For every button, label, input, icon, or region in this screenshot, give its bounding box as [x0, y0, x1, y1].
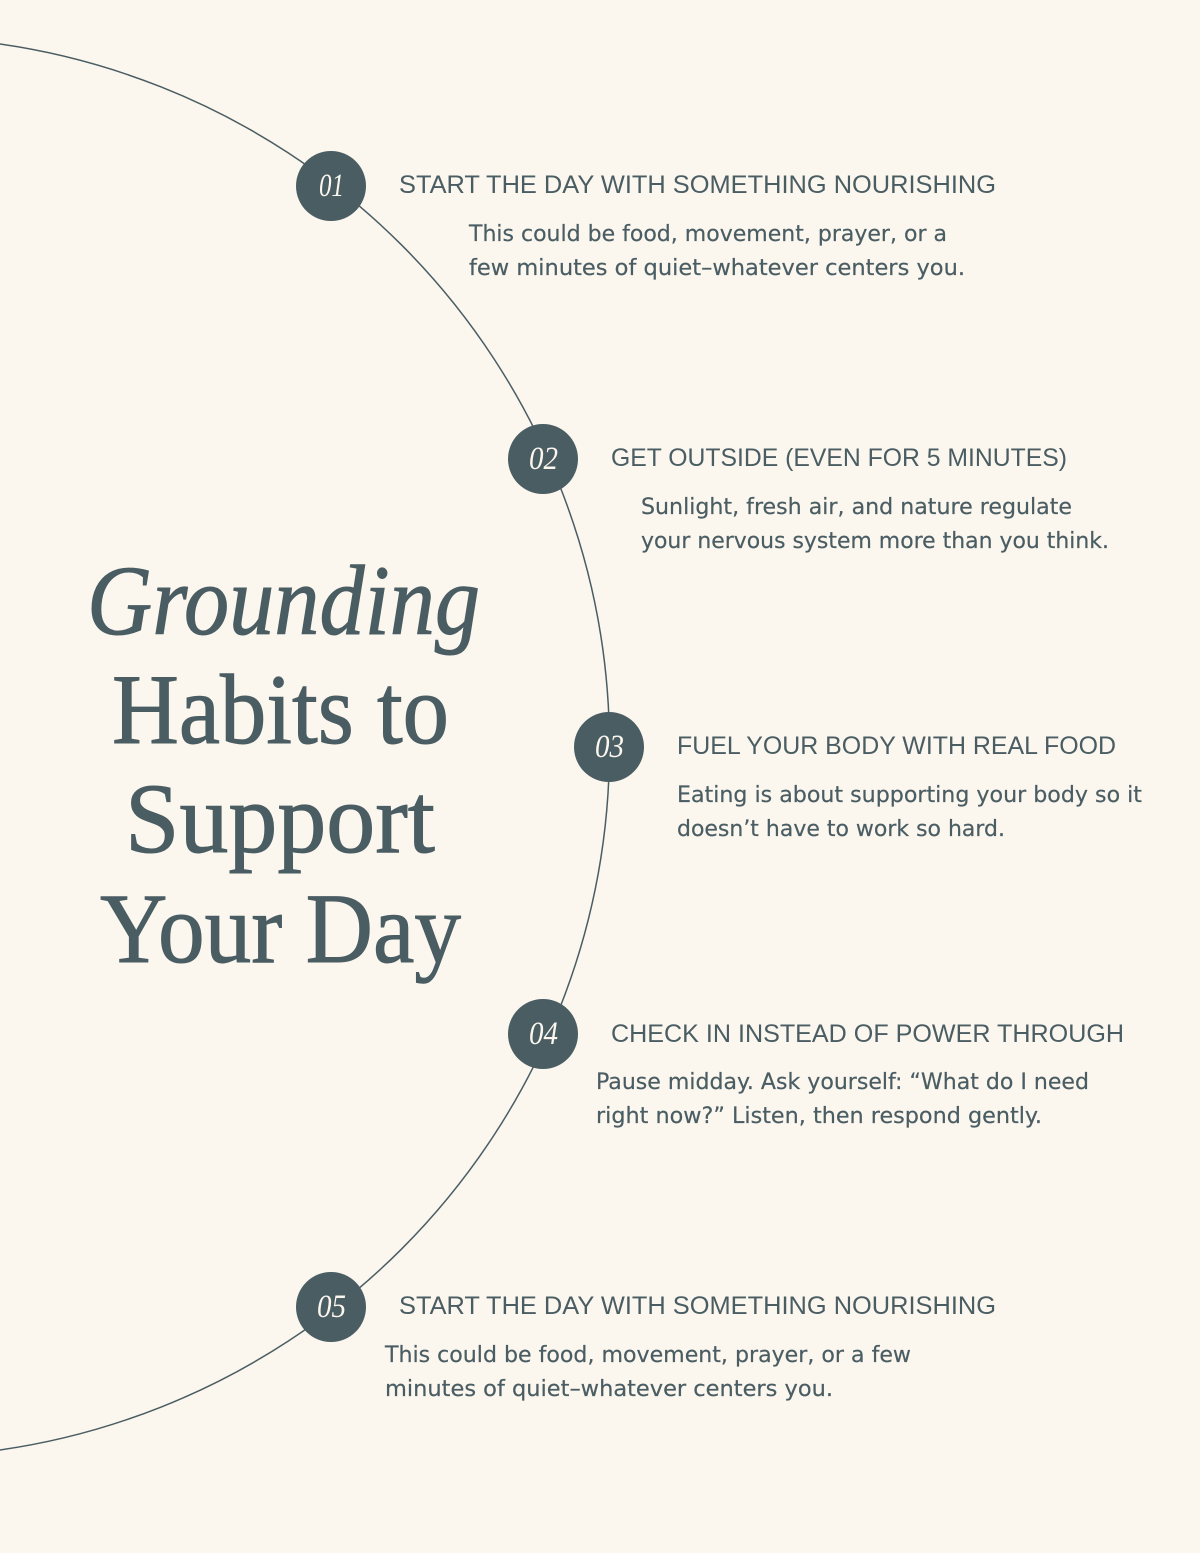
- title: Grounding: [87, 545, 480, 656]
- body 01: This could be food, movement, prayer, or a: [468, 222, 947, 247]
- body 03: Eating is about supporting your body so it: [677, 783, 1142, 808]
- body 04: [596, 1070, 1089, 1129]
- title: [87, 545, 480, 984]
- badge 01: 01: [319, 168, 344, 204]
- body 05: [384, 1343, 911, 1402]
- step 05: [296, 1272, 996, 1402]
- badge 05: [296, 1272, 366, 1342]
- step 03: [574, 712, 1142, 842]
- body 04: Pause midday. Ask yourself: “What do I need: [596, 1070, 1089, 1095]
- step 04: [508, 999, 1124, 1129]
- badge 03: 03: [595, 729, 624, 765]
- badge 04: [508, 999, 578, 1069]
- heading 04: CHECK IN INSTEAD OF POWER THROUGH: [611, 1020, 1124, 1048]
- body 02: [641, 495, 1109, 554]
- heading 01: START THE DAY WITH SOMETHING NOURISHING: [399, 171, 996, 199]
- heading 05: START THE DAY WITH SOMETHING NOURISHING: [399, 1292, 996, 1320]
- badge 02: 02: [529, 441, 558, 477]
- title: Your Day: [100, 873, 461, 984]
- title: Habits to: [112, 654, 449, 765]
- badge 01: [296, 151, 366, 221]
- badge 02: [508, 424, 578, 494]
- body 02: your nervous system more than you think.: [641, 529, 1109, 554]
- body 02: Sunlight, fresh air, and nature regulate: [641, 495, 1072, 520]
- step 01: [296, 151, 996, 281]
- heading 03: FUEL YOUR BODY WITH REAL FOOD: [677, 732, 1116, 760]
- body 04: right now?” Listen, then respond gently.: [596, 1104, 1042, 1129]
- body 05: minutes of quiet–whatever centers you.: [385, 1377, 833, 1402]
- heading 02: GET OUTSIDE (EVEN FOR 5 MINUTES): [611, 444, 1067, 472]
- title: Support: [125, 763, 435, 874]
- body 01: [468, 222, 965, 281]
- badge 04: 04: [529, 1016, 558, 1052]
- body 03: [677, 783, 1142, 842]
- step 02: [508, 424, 1109, 554]
- body 01: few minutes of quiet–whatever centers you.: [469, 256, 965, 281]
- badge 03: [574, 712, 644, 782]
- timeline arc: [0, 37, 610, 1457]
- badge 05: 05: [317, 1289, 346, 1325]
- body 03: doesn’t have to work so hard.: [677, 817, 1005, 842]
- body 05: This could be food, movement, prayer, or a few: [384, 1343, 911, 1368]
